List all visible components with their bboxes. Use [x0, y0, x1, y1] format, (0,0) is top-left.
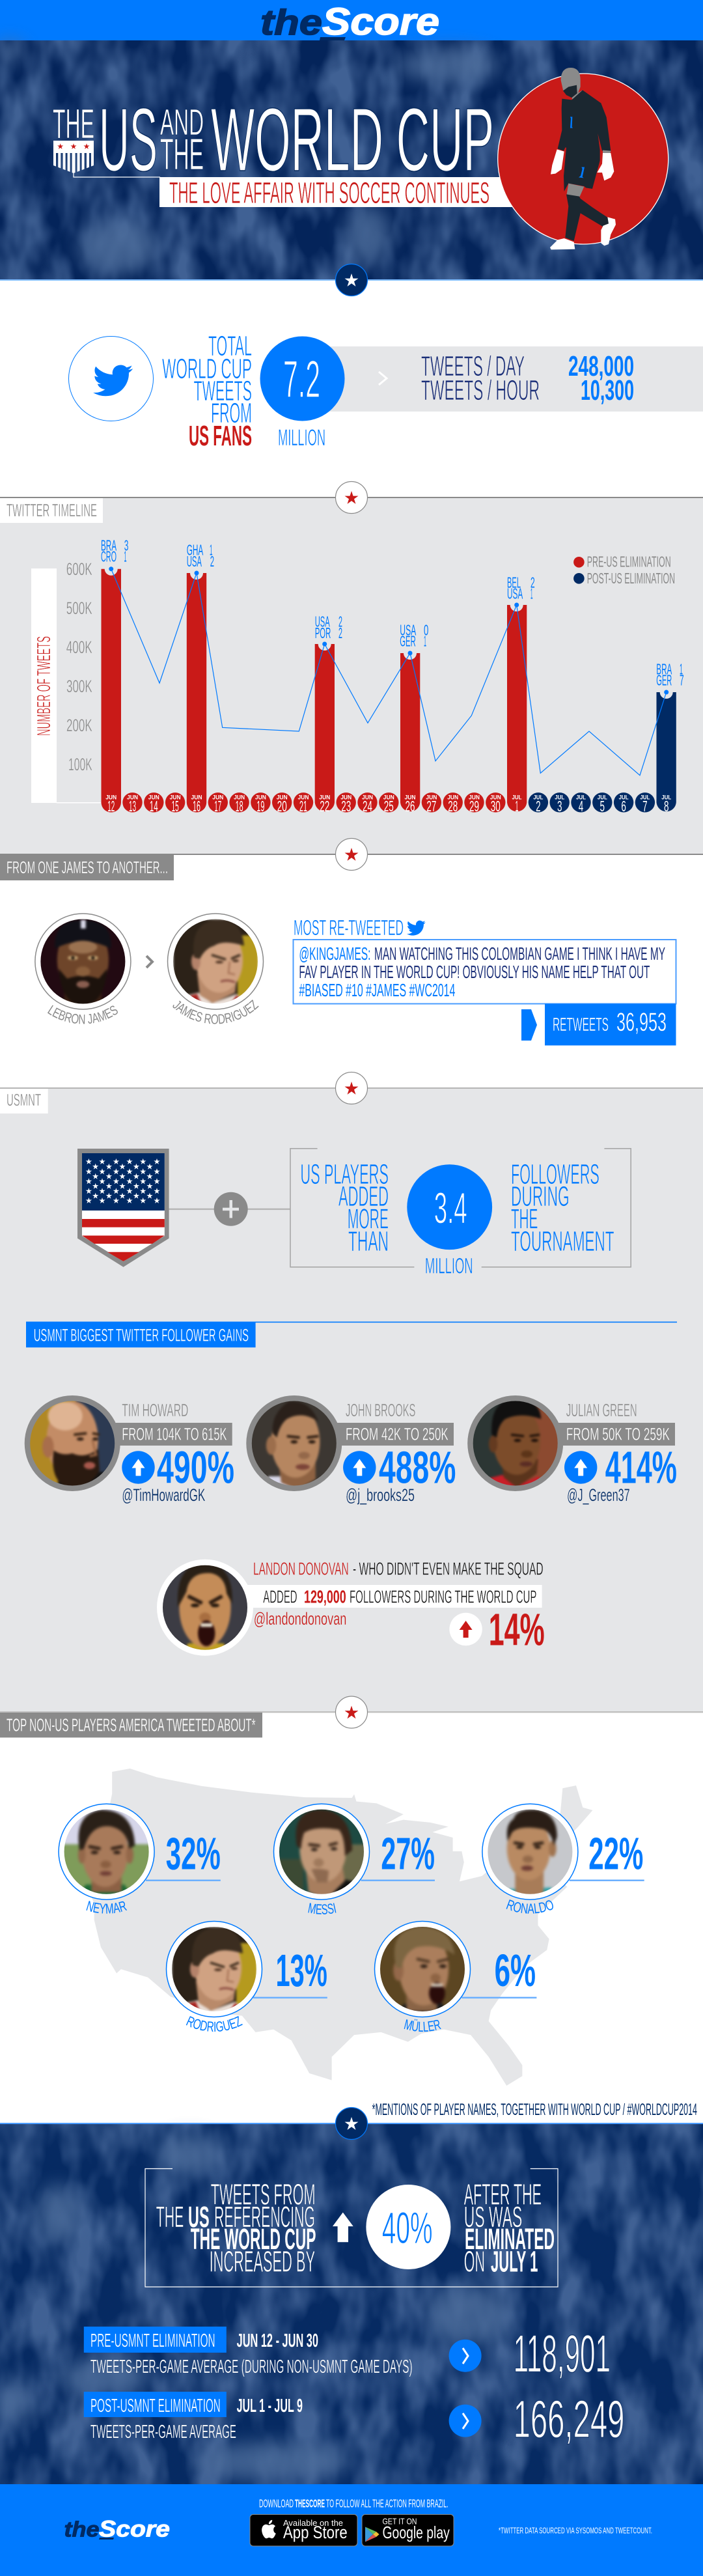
heading — [0, 1713, 262, 1737]
section: twitter timeline — [0, 497, 703, 854]
date circles: 8 — [664, 798, 669, 815]
player: Julian Green — [467, 1395, 677, 1505]
total tweets caption: WORLD CUP — [162, 354, 252, 385]
match score labels — [101, 537, 684, 689]
stat row: post-elimination: TWEETS-PER-GAME AVERAGE — [90, 2422, 236, 2443]
match score labels: 1 — [680, 661, 683, 678]
date circles: 24 — [363, 798, 372, 815]
match score labels: BEL — [507, 574, 521, 591]
most re-tweeted heading: MOST RE-TWEETED — [294, 916, 404, 940]
badge: red star 1 — [336, 482, 367, 513]
player: Muller — [374, 1921, 536, 2032]
tweet quote box: #BIASED #10 #JAMES #WC2014 — [299, 980, 455, 1000]
player: Tim Howard: @TimHowardGK — [122, 1485, 205, 1505]
40 percent statement: US — [188, 2200, 210, 2233]
stat row: post-elimination: POST-USMNT ELIMINATION — [90, 2396, 221, 2416]
y axis: 400K — [66, 637, 92, 657]
3.4 million callout: 3.4 — [434, 1184, 467, 1233]
date circles: 7 — [642, 798, 648, 815]
stat row: post-elimination — [84, 2390, 624, 2449]
3.4 million callout: THE — [511, 1204, 538, 1235]
logo: theScore: Score — [322, 1, 439, 43]
date circles: JUL — [533, 794, 544, 801]
title: US — [99, 90, 158, 190]
crest shield — [53, 141, 160, 177]
big number 7.2 million — [260, 336, 345, 451]
player: Rodriguez — [165, 1921, 327, 2032]
chevron — [379, 372, 387, 385]
retweets count — [521, 1004, 676, 1046]
date circles: JUN — [383, 794, 394, 801]
date circles: JUL — [661, 794, 672, 801]
date circles: JUN — [362, 794, 373, 801]
callout: Landon Donovan: ADDED — [263, 1587, 297, 1607]
bracket — [145, 2168, 558, 2287]
bar chart — [102, 563, 676, 813]
40 percent statement: THE WORLD CUP — [191, 2222, 316, 2256]
player: Julian Green: JULIAN GREEN — [566, 1400, 637, 1420]
date circles: 20 — [277, 798, 287, 815]
callout: Landon Donovan: 14% — [489, 1604, 545, 1655]
match score labels: 1 — [531, 585, 532, 602]
player: Tim Howard — [25, 1395, 234, 1505]
callout: Landon Donovan: 129,000 — [304, 1587, 346, 1607]
total tweets caption: US FANS — [189, 421, 252, 452]
footer — [0, 2484, 703, 2576]
app store button — [250, 2515, 357, 2546]
google play button — [362, 2515, 454, 2546]
40 percent statement: AFTER THE — [464, 2178, 542, 2211]
date circles: JUL — [512, 794, 522, 801]
player: Rodriguez: 13% — [276, 1945, 327, 1996]
player: Ronaldo — [482, 1804, 644, 1914]
hero crowd background — [0, 40, 703, 280]
heading: TWITTER TIMELINE — [7, 500, 97, 520]
40 percent statement: ELIMINATED — [465, 2222, 555, 2256]
heading — [0, 855, 174, 880]
footer logo: Score — [99, 2517, 170, 2542]
date circles: JUN — [405, 794, 415, 801]
date circles: JUN — [127, 794, 138, 801]
date circles: 4 — [579, 798, 583, 815]
subtitle banner — [159, 176, 524, 210]
match score labels: 3 — [124, 537, 128, 553]
player: Neymar: NEYMAR — [86, 1901, 128, 1914]
y axis — [31, 559, 101, 804]
date circles: JUL — [576, 794, 586, 801]
3.4 million callout: MORE — [348, 1204, 389, 1235]
3.4 million callout: MILLION — [425, 1254, 473, 1279]
date circles: JUL — [598, 794, 607, 801]
biggest gains heading — [26, 1322, 677, 1347]
match score labels: GER — [656, 672, 672, 689]
40 percent statement: INCREASED BY — [210, 2245, 315, 2278]
3.4 million callout: FOLLOWERS — [511, 1159, 600, 1190]
match score labels: GHA — [187, 542, 204, 559]
stat row: pre-elimination: TWEETS-PER-GAME AVERAGE (DURING NON-USMNT GAME DAYS) — [90, 2357, 413, 2377]
red circle — [498, 74, 669, 244]
date circles: 15 — [172, 798, 179, 815]
date circles: 13 — [129, 798, 136, 815]
date circles: 28 — [448, 798, 458, 815]
date circles: JUN — [298, 794, 309, 801]
footer logo: the — [64, 2517, 99, 2541]
date circles: 2 — [536, 798, 541, 815]
portrait: James Rodriguez — [167, 913, 264, 1024]
player: Tim Howard: TIM HOWARD — [122, 1400, 188, 1420]
date circles: 30 — [491, 798, 501, 815]
date circles: JUN — [212, 794, 223, 801]
section: after elimination — [0, 2123, 703, 2484]
date circles: JUN — [490, 794, 501, 801]
portrait: James Rodriguez: JAMES RODRIGUEZ — [173, 1000, 259, 1024]
player: Messi: 27% — [381, 1828, 435, 1879]
match score labels: USA — [187, 553, 202, 570]
40 percent statement: JULY 1 — [491, 2245, 538, 2278]
date circles: JUN — [319, 794, 330, 801]
player: Ronaldo: RONALDO — [506, 1899, 553, 1914]
goalkeeper figure — [550, 68, 616, 249]
player: Rodriguez: RODRIGUEZ — [186, 2016, 243, 2032]
footer logo — [64, 2517, 170, 2542]
date circles: JUN — [277, 794, 288, 801]
40 percent statement — [156, 2178, 555, 2278]
date circles: 18 — [236, 798, 243, 815]
section: total tweets: FROM — [211, 398, 252, 429]
flag shield — [77, 1149, 169, 1267]
google play button: GET IT ON — [383, 2517, 417, 2527]
heading — [0, 1089, 48, 1113]
stat row: pre-elimination — [84, 2325, 611, 2384]
retweets count: 36,953 — [616, 1008, 667, 1037]
3.4 million callout: THAN — [348, 1226, 389, 1257]
section: from one James to another — [0, 854, 703, 1046]
legend — [573, 553, 675, 587]
stat row: pre-elimination: 118,901 — [514, 2325, 611, 2384]
date circles: JUN — [148, 794, 159, 801]
portrait: LeBron James: LEBRON JAMES — [48, 1005, 118, 1024]
date circles: 22 — [320, 798, 329, 815]
logo: theScore — [260, 1, 439, 43]
google play button: Google play — [383, 2523, 450, 2542]
match score labels: GER — [400, 633, 416, 650]
date circles: 3 — [557, 798, 562, 815]
big number 7.2 million: 7.2 — [283, 350, 320, 409]
3.4 million callout: US PLAYERS — [300, 1159, 389, 1190]
date circles: 21 — [299, 798, 307, 815]
y axis: 300K — [66, 677, 92, 696]
date circles: JUN — [469, 794, 480, 801]
match score labels: 1 — [124, 548, 126, 565]
player: Muller: MÜLLER — [404, 2019, 441, 2032]
player: Ronaldo: 22% — [588, 1828, 643, 1879]
date circles: 1 — [516, 798, 518, 815]
download prompt — [259, 2497, 448, 2510]
match score labels: CRO — [101, 548, 117, 565]
match score labels: USA — [315, 613, 330, 630]
player: John Brooks: JOHN BROOKS — [346, 1400, 415, 1420]
y axis: 100K — [68, 755, 92, 774]
match score labels: BRA — [101, 537, 117, 553]
3.4 million callout: ADDED — [338, 1181, 389, 1212]
date circles: JUN — [234, 794, 245, 801]
player: Messi: MESSI — [308, 1903, 336, 1914]
chevron — [146, 956, 152, 968]
biggest gains heading: USMNT BIGGEST TWITTER FOLLOWER GAINS — [34, 1325, 249, 1345]
tweet volume line — [109, 567, 669, 776]
player: John Brooks: FROM 42K TO 250K — [346, 1425, 448, 1444]
match score labels: 2 — [210, 553, 214, 570]
badge: red star 3 — [336, 1072, 367, 1104]
date circles: 23 — [341, 798, 351, 815]
most re-tweeted heading — [294, 916, 426, 940]
player: John Brooks: @j_brooks25 — [346, 1485, 415, 1505]
heading — [0, 498, 103, 523]
app store button: App Store — [283, 2523, 348, 2542]
download prompt: TO FOLLOW ALL THE ACTION FROM BRAZIL. — [326, 2497, 448, 2510]
stat row: pre-elimination: JUN 12 - JUN 30 — [237, 2331, 318, 2351]
title: AND — [160, 102, 204, 143]
stat row: post-elimination: 166,249 — [514, 2390, 624, 2449]
connector — [169, 1209, 290, 1210]
date circles: 16 — [193, 798, 200, 815]
logo: theScore: the — [260, 2, 322, 42]
player: John Brooks — [246, 1395, 456, 1505]
match score labels: 1 — [424, 633, 426, 650]
heading: FROM ONE JAMES TO ANOTHER... — [7, 858, 168, 877]
match score labels: 2 — [338, 624, 342, 641]
player: Neymar — [58, 1804, 221, 1914]
big number 7.2 million: MILLION — [278, 425, 325, 451]
y axis: 600K — [66, 559, 92, 579]
3.4 million callout: DURING — [511, 1181, 570, 1212]
40 percent statement: US WAS — [464, 2200, 522, 2233]
date circles — [105, 792, 672, 815]
40 percent statement: 40% — [382, 2203, 433, 2253]
date circles: JUN — [447, 794, 458, 801]
plus icon — [214, 1192, 248, 1226]
match score labels: USA — [507, 585, 523, 602]
date circles: JUN — [426, 794, 437, 801]
section: USMNT — [0, 1087, 703, 1712]
date circles: 26 — [405, 798, 415, 815]
tweets rate stats: 10,300 — [581, 375, 634, 406]
section: total tweets — [0, 279, 703, 497]
date circles: JUN — [340, 794, 352, 801]
date circles: JUN — [191, 794, 202, 801]
callout: Landon Donovan: LANDON DONOVAN — [253, 1558, 349, 1578]
date circles: JUL — [619, 794, 629, 801]
tweets rate stats: TWEETS / DAY — [421, 351, 525, 382]
date circles: 25 — [384, 798, 394, 815]
match score labels: 2 — [531, 574, 535, 591]
gray stats band — [302, 346, 703, 412]
section: total tweets: TWEETS — [194, 376, 252, 407]
stat row: pre-elimination: PRE-USMNT ELIMINATION — [90, 2331, 215, 2351]
tweets rate stats — [421, 351, 634, 406]
total tweets caption — [162, 331, 252, 452]
match score labels: POR — [315, 624, 331, 641]
portrait: LeBron James — [34, 913, 131, 1024]
match score labels: 7 — [680, 672, 684, 689]
player: Messi — [273, 1804, 435, 1914]
date circles: 29 — [469, 798, 479, 815]
date circles: 27 — [426, 798, 436, 815]
download prompt: DOWNLOAD — [259, 2497, 294, 2510]
tweets rate stats: 248,000 — [568, 351, 634, 382]
map: USA silhouette — [85, 1769, 592, 2086]
callout: Landon Donovan: FOLLOWERS DURING THE WORLD CUP — [350, 1587, 536, 1607]
player: Tim Howard: FROM 104K TO 615K — [122, 1425, 227, 1444]
player: Neymar: 32% — [166, 1828, 221, 1879]
date circles: 17 — [214, 798, 221, 815]
tweets rate stats: TWEETS / HOUR — [421, 375, 540, 406]
40 percent statement: THE — [156, 2200, 184, 2233]
title — [53, 90, 494, 190]
40 percent statement: REFERENCING — [214, 2200, 315, 2233]
match score labels: 2 — [338, 613, 342, 630]
date circles: 5 — [600, 798, 605, 815]
date circles: 12 — [107, 798, 115, 815]
date circles: JUN — [255, 794, 266, 801]
callout: Landon Donovan — [157, 1558, 545, 1656]
tweet quote box: @KINGJAMES: — [299, 944, 370, 964]
date circles: 6 — [621, 798, 626, 815]
player: John Brooks: 488% — [379, 1442, 456, 1493]
callout: Landon Donovan: - WHO DIDN'T EVEN MAKE THE SQUAD — [353, 1558, 544, 1578]
tweet quote box — [293, 940, 676, 1004]
date circles: 14 — [150, 798, 158, 815]
player: Julian Green: @J_Green37 — [567, 1485, 630, 1505]
y axis: NUMBER OF TWEETS — [34, 636, 55, 736]
crowd background — [0, 2123, 703, 2484]
section: top non-US players — [0, 1711, 703, 2119]
badge: red star 2 — [336, 839, 367, 870]
match score labels: 1 — [210, 542, 212, 559]
date circles: JUN — [170, 794, 181, 801]
retweets count: RETWEETS — [553, 1015, 609, 1035]
section: total tweets: TOTAL — [208, 331, 252, 362]
date circles: JUL — [640, 794, 650, 801]
header bar — [0, 0, 703, 40]
download prompt: THESCORE — [295, 2497, 325, 2510]
badge: navy star top — [336, 264, 367, 296]
bracket — [290, 1149, 631, 1267]
callout: Landon Donovan: @landondonovan — [254, 1609, 346, 1629]
date circles: JUN — [105, 794, 117, 801]
player: Muller: 6% — [495, 1945, 536, 1996]
stat row: post-elimination: JUL 1 - JUL 9 — [237, 2396, 303, 2416]
app store button: Available on the — [283, 2518, 343, 2528]
3.4 million callout — [300, 1159, 614, 1279]
match score labels: 0 — [424, 622, 428, 639]
player: Tim Howard: 490% — [157, 1442, 234, 1493]
hero panel — [0, 40, 703, 280]
title: THE — [160, 130, 204, 179]
badge: red star 4 — [336, 1696, 367, 1728]
date circles: 19 — [256, 798, 264, 815]
match score labels: BRA — [656, 661, 672, 678]
y axis: 200K — [66, 716, 92, 735]
badge: navy star bottom — [336, 2107, 367, 2140]
title: THE — [53, 100, 94, 147]
date circles: JUL — [555, 794, 565, 801]
40 percent statement: TWEETS FROM — [211, 2178, 316, 2211]
match score labels: USA — [400, 622, 417, 639]
heading: USMNT — [7, 1090, 41, 1110]
40 percent statement: ON — [464, 2245, 485, 2278]
heading: TOP NON-US PLAYERS AMERICA TWEETED ABOUT* — [7, 1715, 256, 1735]
icon: twitter bird in circle — [69, 336, 154, 421]
y axis: 500K — [66, 598, 92, 618]
